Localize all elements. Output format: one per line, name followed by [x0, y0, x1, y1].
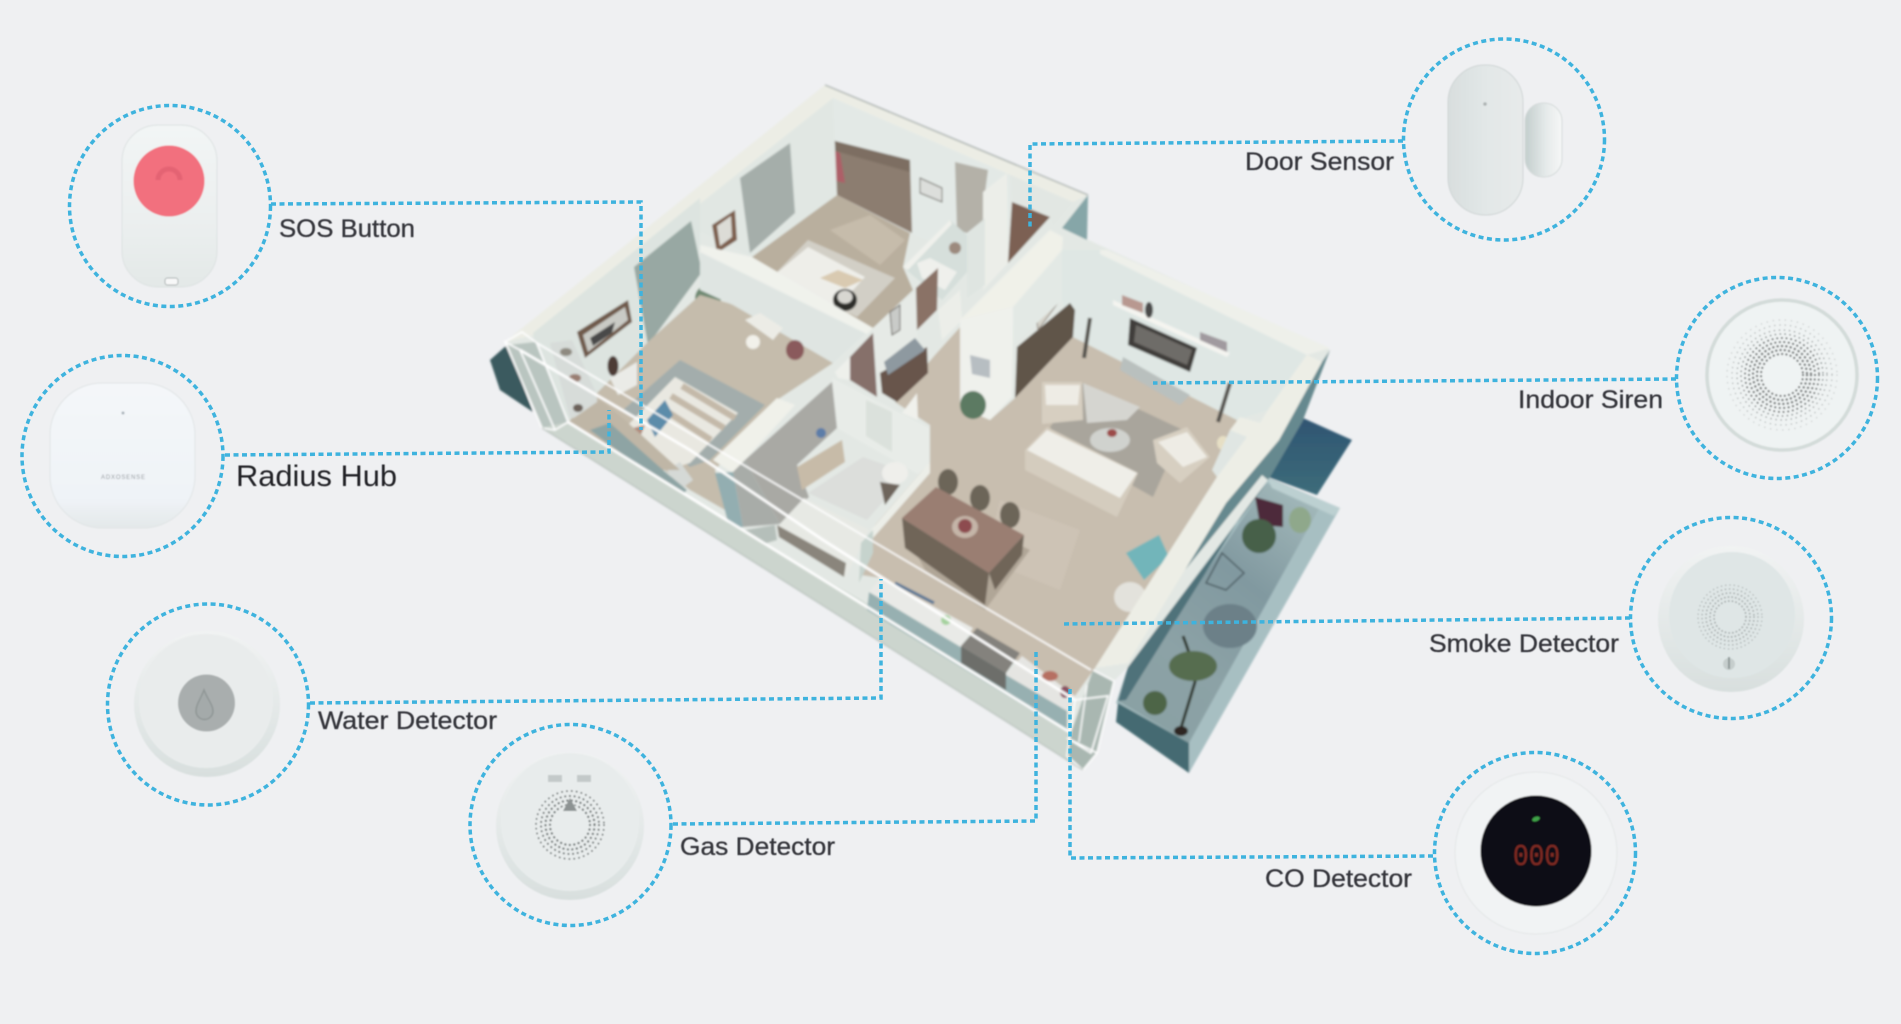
- small bathroom: [903, 220, 967, 300]
- door: entrance: [1008, 202, 1050, 263]
- armchair 1: [1042, 382, 1083, 424]
- device: SOS Button: [70, 106, 270, 306]
- line: Door Sensor: [1030, 141, 1403, 228]
- cabinet and vase: [608, 356, 637, 395]
- top bedroom rug and bed: [772, 240, 895, 317]
- picture left bedroom: [577, 300, 632, 358]
- floor speakers: [1084, 318, 1230, 422]
- window left bedroom: [634, 221, 702, 345]
- left base shadow: [490, 345, 533, 412]
- line: CO Detector: [1070, 687, 1433, 858]
- entrance wall: [983, 173, 1008, 290]
- front bottom glass strip: [542, 422, 1083, 770]
- outer rims: [505, 85, 833, 342]
- entrance pillar: [960, 230, 1063, 420]
- kitchen counter: [867, 578, 1075, 732]
- apartment slab: [505, 85, 1330, 770]
- notch wall: [1010, 173, 1073, 227]
- device: CO Detector: [1434, 752, 1636, 954]
- device: Door Sensor: [1404, 39, 1604, 240]
- notch outer wall: [1062, 195, 1088, 240]
- label: Indoor Siren: Indoor Siren: [1518, 386, 1663, 414]
- label: Door Sensor: Door Sensor: [1245, 148, 1394, 176]
- side table: [1114, 582, 1146, 612]
- line: SOS Button: [271, 202, 641, 430]
- device: Indoor Siren: [1676, 278, 1878, 478]
- living room back rim: [1100, 250, 1330, 355]
- connector lines: [225, 141, 1676, 858]
- blue chair: [1126, 535, 1169, 580]
- shelves: [550, 340, 597, 418]
- outer right wall face: [1128, 350, 1330, 663]
- label: Smoke Detector: Smoke Detector: [1429, 630, 1619, 658]
- line: Radius Hub: [225, 410, 609, 455]
- line: Gas Detector: [673, 650, 1036, 824]
- left bedroom bed: [618, 377, 738, 490]
- device: Radius Hub: [22, 356, 223, 556]
- hall and living floor: [861, 325, 1237, 696]
- armchair 2: [1153, 427, 1210, 483]
- left bedroom rug: [623, 360, 765, 467]
- side table: [1217, 436, 1229, 450]
- device: Water Detector: [108, 604, 308, 805]
- floor plan: 3D apartment cutaway: [490, 85, 1352, 773]
- grey wall panel: [955, 162, 988, 233]
- picture top bedroom: [712, 210, 737, 253]
- device: Radius Hub: ADXOSENSE: [101, 475, 145, 481]
- wall art above console: [1033, 263, 1060, 330]
- dining shadow: [904, 500, 1030, 610]
- window and wall: left bedroom: [533, 198, 700, 420]
- device: Gas Detector: [470, 724, 671, 926]
- end box: [508, 342, 1114, 770]
- coffee table: [1090, 428, 1130, 452]
- top bedroom floor: [752, 195, 913, 328]
- label: Radius Hub: Radius Hub: [236, 460, 397, 493]
- dressing table and stool: [745, 313, 804, 360]
- dining table: [902, 469, 1024, 605]
- living room back wall: [1062, 250, 1307, 420]
- device: CO Detector: 000: [1513, 840, 1560, 875]
- label: Gas Detector: Gas Detector: [680, 833, 835, 861]
- wardrobe: [815, 138, 912, 233]
- living room rug: [1050, 383, 1183, 497]
- counter before bed: [590, 423, 687, 497]
- slab outer edge line: [542, 428, 1083, 770]
- top bedroom left wall: [700, 98, 837, 257]
- small hall wall: [902, 393, 918, 420]
- terrace: [1268, 418, 1352, 495]
- partition wall brown: [873, 292, 917, 373]
- device: Smoke Detector: [1630, 518, 1832, 718]
- back edge line: [825, 85, 1088, 195]
- partition top/left bedrooms: [700, 250, 867, 363]
- console: [1015, 303, 1075, 398]
- line: Water Detector: [310, 579, 881, 703]
- plant by window: [695, 285, 721, 311]
- label: SOS Button: SOS Button: [279, 215, 415, 243]
- window top bedroom: [740, 143, 795, 253]
- TV and shelf: [1113, 295, 1230, 405]
- back wall: [833, 98, 1012, 270]
- right wall band: [1095, 355, 1322, 668]
- small floor strip: [568, 400, 680, 470]
- lower bathroom: [713, 378, 930, 583]
- left bedroom floor: [570, 295, 833, 510]
- sofa: [1025, 427, 1138, 517]
- line: Smoke Detector: [1061, 618, 1630, 624]
- balcony: [1116, 477, 1340, 773]
- label: CO Detector: CO Detector: [1265, 865, 1412, 893]
- glass box lines: [505, 332, 1114, 770]
- label: Water Detector: Water Detector: [318, 707, 497, 735]
- small wall art: [920, 178, 942, 202]
- line: Indoor Siren: [1153, 379, 1676, 383]
